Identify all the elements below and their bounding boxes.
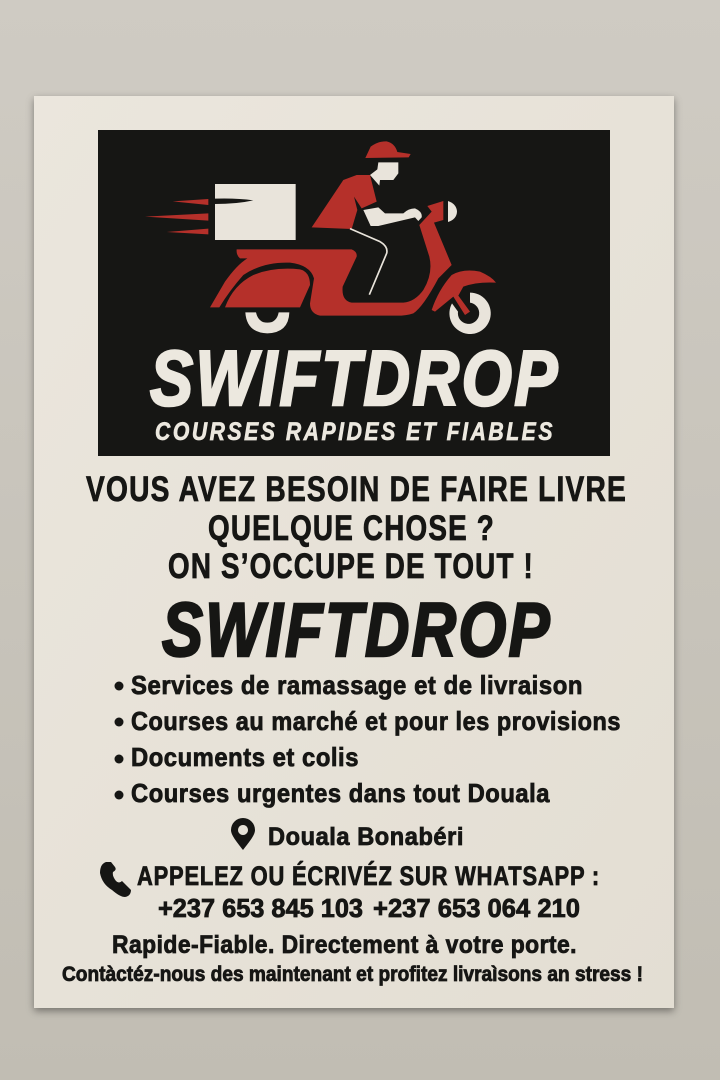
- contact: APPELEZ OU ÉCRIVÉZ SUR WHATSAPP :: [137, 860, 600, 891]
- scooter body: [210, 201, 452, 316]
- services list: Courses urgentes dans tout Douala: [131, 778, 550, 808]
- contact: [100, 860, 600, 923]
- rear wheel: [245, 312, 289, 333]
- rider leg line: [350, 229, 387, 295]
- rider torso: [312, 175, 377, 229]
- headline: QUELQUE CHOSE ?: [208, 509, 495, 548]
- headline: ON S’OCCUPE DE TOUT !: [168, 547, 534, 586]
- delivery box: [215, 184, 296, 240]
- services list: Services de ramassage et de livraison: [131, 670, 583, 700]
- scooter front mudguard: [432, 271, 496, 315]
- logo wordmark: SWIFTDROP: [150, 334, 560, 422]
- panel: poster sheet: [34, 96, 674, 1008]
- icon: map pin: [231, 818, 255, 850]
- location: Douala Bonabéri: [268, 823, 464, 851]
- rider arm: [363, 207, 422, 226]
- rider cap: [365, 141, 411, 158]
- headlight: [448, 201, 457, 222]
- contact: +237 653 845 103: [158, 893, 363, 923]
- headline: [86, 470, 627, 586]
- closing call to action: Contàctéz-nous des maintenant et profitez livraìsons an stress !: [62, 963, 643, 986]
- services list: [114, 670, 621, 808]
- brand name: SWIFTDROP: [162, 588, 552, 673]
- speed lines: [145, 199, 208, 234]
- rider head: [370, 162, 398, 186]
- icon: delivery scooter rider: [145, 141, 496, 334]
- tagline: Rapide-Fiable. Directement à votre porte.: [112, 931, 577, 959]
- front wheel: [449, 293, 491, 334]
- contact: +237 653 064 210: [373, 893, 580, 923]
- icon: telephone: [100, 862, 131, 897]
- services list: Courses au marché et pour les provisions: [131, 706, 621, 736]
- location: [231, 818, 464, 851]
- scooter rear panel: [225, 269, 310, 307]
- services list: Documents et colis: [131, 742, 359, 772]
- panel: logo banner: [98, 130, 610, 456]
- logo tagline: COURSES RAPIDES ET FIABLES: [155, 418, 555, 446]
